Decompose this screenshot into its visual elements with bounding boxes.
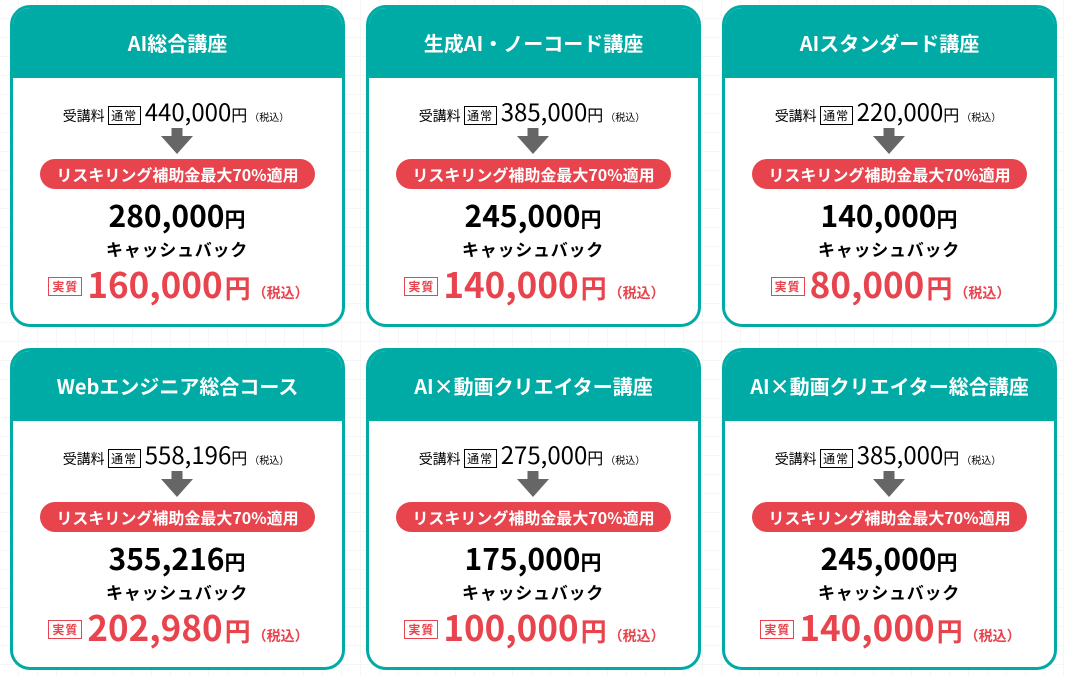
cashback label: キャッシュバック: [818, 579, 960, 604]
effective price: 円: [926, 269, 952, 306]
effective price: 実質: [775, 278, 801, 294]
heading: 生成AI・ノーコード講座: [424, 28, 643, 57]
regular price: （税込）: [605, 109, 645, 124]
effective price: [760, 601, 1021, 652]
icon: down arrow: [161, 471, 193, 497]
regular price: 558,196: [145, 436, 231, 471]
effective price: （税込）: [609, 283, 665, 303]
effective price: （税込）: [609, 626, 665, 646]
effective price: 100,000: [443, 601, 579, 652]
effective price: [48, 601, 309, 652]
heading: [10, 348, 345, 421]
icon: down arrow: [517, 128, 549, 154]
regular price: （税込）: [961, 109, 1001, 124]
regular price: [419, 436, 645, 471]
regular price: 通常: [111, 106, 137, 124]
effective price: （税込）: [965, 626, 1021, 646]
effective price: [404, 601, 665, 652]
regular price: （税込）: [605, 452, 645, 467]
panel: Webエンジニア総合コース: [10, 348, 345, 670]
heading: AI×動画クリエイター総合講座: [750, 371, 1029, 400]
heading: AI×動画クリエイター講座: [414, 371, 653, 400]
regular price: （税込）: [249, 109, 289, 124]
effective price: 140,000: [799, 601, 935, 652]
cashback amount: 円: [580, 204, 601, 234]
regular price: 受講料: [775, 449, 817, 469]
regular price: 円: [943, 102, 959, 126]
panel: AIスタンダード講座: [722, 5, 1057, 327]
panel: AI総合講座: [10, 5, 345, 327]
heading: [722, 5, 1057, 78]
cashback label: キャッシュバック: [106, 236, 248, 261]
effective price: 実質: [52, 278, 78, 294]
effective price: 実質: [52, 620, 78, 638]
panel: AI×動画クリエイター総合講座: [722, 348, 1057, 670]
effective price: （税込）: [253, 626, 309, 646]
regular price: [419, 93, 645, 128]
regular price: 受講料: [419, 106, 461, 126]
regular price: 通常: [111, 450, 137, 466]
regular price: 通常: [823, 450, 849, 466]
effective price: 円: [581, 612, 607, 649]
cashback amount: 140,000: [821, 192, 936, 236]
heading: [366, 348, 701, 421]
cashback amount: 245,000: [465, 192, 580, 236]
icon: down arrow: [517, 471, 549, 497]
heading: [366, 5, 701, 78]
effective price: [771, 258, 1010, 309]
regular price: 通常: [467, 450, 493, 466]
cashback amount: 円: [936, 547, 957, 577]
effective price: 140,000: [443, 258, 579, 309]
regular price: 円: [231, 102, 247, 126]
effective price: （税込）: [954, 283, 1010, 303]
regular price: 通常: [823, 106, 849, 124]
cashback label: キャッシュバック: [818, 236, 960, 261]
subsidy pill: リスキリング補助金最大70%適用: [768, 162, 1011, 186]
regular price: [775, 436, 1001, 471]
cashback label: キャッシュバック: [106, 579, 248, 604]
regular price: （税込）: [249, 452, 289, 467]
subsidy pill: リスキリング補助金最大70%適用: [412, 162, 655, 186]
cashback amount: 円: [936, 204, 957, 234]
icon: down arrow: [873, 128, 905, 154]
regular price: [63, 436, 289, 471]
effective price: 円: [581, 269, 607, 306]
regular price: 受講料: [63, 106, 105, 126]
cashback amount: 円: [224, 547, 245, 577]
regular price: 275,000: [501, 436, 587, 471]
effective price: 160,000: [87, 258, 223, 309]
subsidy pill: リスキリング補助金最大70%適用: [56, 505, 299, 529]
cashback label: キャッシュバック: [462, 579, 604, 604]
regular price: 通常: [467, 106, 493, 124]
heading: AIスタンダード講座: [800, 28, 979, 57]
cashback amount: 245,000: [821, 535, 936, 579]
icon: down arrow: [161, 128, 193, 154]
regular price: 受講料: [419, 449, 461, 469]
regular price: [63, 93, 289, 128]
regular price: （税込）: [961, 452, 1001, 467]
regular price: 円: [587, 445, 603, 469]
regular price: 385,000: [501, 93, 587, 128]
regular price: 385,000: [857, 436, 943, 471]
cashback amount: 円: [224, 204, 245, 234]
cashback amount: 円: [580, 547, 601, 577]
effective price: 円: [937, 612, 963, 649]
regular price: 円: [587, 102, 603, 126]
subsidy pill: リスキリング補助金最大70%適用: [412, 505, 655, 529]
icon: down arrow: [873, 471, 905, 497]
effective price: （税込）: [253, 283, 309, 303]
cashback amount: 175,000: [465, 535, 580, 579]
effective price: [48, 258, 309, 309]
regular price: 円: [943, 445, 959, 469]
effective price: 実質: [408, 278, 434, 294]
heading: AI総合講座: [128, 28, 227, 57]
regular price: 円: [231, 445, 247, 469]
regular price: 受講料: [63, 449, 105, 469]
panel: 生成AI・ノーコード講座: [366, 5, 701, 327]
subsidy pill: リスキリング補助金最大70%適用: [768, 505, 1011, 529]
regular price: [775, 93, 1001, 128]
regular price: 220,000: [857, 93, 943, 128]
effective price: 円: [225, 269, 251, 306]
heading: [722, 348, 1057, 421]
effective price: 202,980: [87, 601, 223, 652]
effective price: [404, 258, 665, 309]
cashback label: キャッシュバック: [462, 236, 604, 261]
effective price: 実質: [764, 620, 790, 638]
regular price: 440,000: [145, 93, 231, 128]
cashback amount: 280,000: [109, 192, 224, 236]
effective price: 実質: [408, 620, 434, 638]
heading: [10, 5, 345, 78]
heading: Webエンジニア総合コース: [57, 371, 298, 400]
panel: AI×動画クリエイター講座: [366, 348, 701, 670]
effective price: 円: [225, 612, 251, 649]
effective price: 80,000: [810, 258, 924, 309]
regular price: 受講料: [775, 106, 817, 126]
subsidy pill: リスキリング補助金最大70%適用: [56, 162, 299, 186]
cashback amount: 355,216: [109, 535, 224, 579]
